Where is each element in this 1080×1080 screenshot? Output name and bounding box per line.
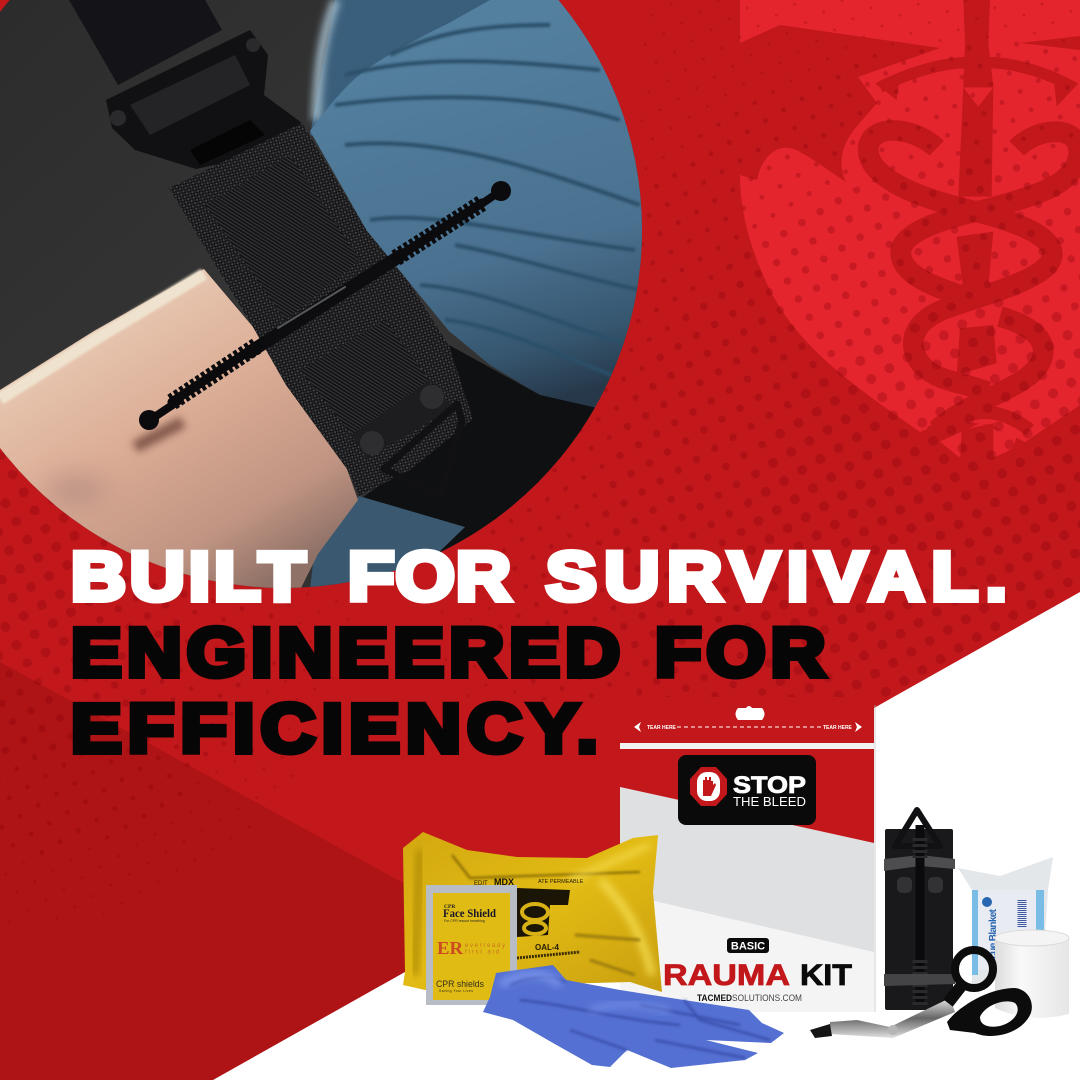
tail of emblem	[940, 423, 1017, 457]
hemostatic bandage: OAL-4	[535, 943, 560, 952]
CPR face shield packet: CPR shields	[436, 979, 484, 990]
trauma kit title: RAUMA	[663, 959, 790, 992]
CPR face shield packet: Face Shield	[443, 906, 496, 920]
headline	[71, 538, 1007, 767]
crossbar	[880, 63, 1073, 87]
staff	[958, 0, 993, 197]
caduceus watermark emblem	[740, 0, 1080, 462]
bandage emblem	[517, 888, 570, 937]
trauma kit title: KIT	[800, 959, 852, 992]
line 2: engineered for: ENGINEERED	[71, 614, 620, 691]
CPR face shield packet: Saving Your Lives	[439, 989, 473, 993]
tear line	[634, 722, 862, 732]
CPR face shield packet: everready	[465, 943, 505, 949]
line 2: engineered for: FOR	[655, 614, 826, 691]
top strap	[69, 0, 222, 85]
CPR face shield packet	[426, 885, 517, 1005]
right snake	[901, 132, 1079, 430]
trauma kit title	[638, 959, 852, 992]
hemostatic bandage	[403, 832, 662, 992]
tourniquet band	[169, 123, 473, 496]
stop the bleed logo: THE BLEED	[733, 794, 806, 809]
hemostatic bandage: EDIT	[474, 881, 488, 887]
basic badge: BASIC	[731, 940, 765, 952]
rescue blanket pack	[958, 857, 1053, 985]
end plate and triangle ring	[352, 381, 466, 478]
tear line: TEAR HERE	[823, 725, 853, 731]
line 3: efficiency: EFFICIENCY.	[71, 690, 598, 767]
hemostatic bandage: ATE PERMEABLE	[538, 879, 584, 885]
CPR face shield packet: ER	[437, 938, 464, 958]
windlass rod	[139, 181, 511, 430]
CPR face shield packet: first aid	[465, 950, 499, 956]
CPR face shield packet: For CPR rescue breathing	[444, 919, 485, 923]
hang hole	[736, 706, 764, 720]
shirt behind	[306, 0, 560, 136]
blue shirt sleeve	[310, 0, 650, 420]
blue nitrile gloves	[483, 965, 784, 1068]
trauma kit title: T	[638, 959, 656, 992]
line 1: built for survival	[71, 538, 1007, 615]
trauma kit package	[620, 697, 876, 1012]
medical tape roll	[995, 930, 1069, 1018]
basic badge	[727, 938, 769, 953]
stop the bleed logo: STOP	[733, 772, 806, 799]
rescue blanket pack: Rescue Blanket	[988, 908, 999, 975]
halftone dot texture right	[440, 0, 1080, 700]
halftone dot texture left	[0, 210, 360, 930]
hemostatic bandage: MDX	[494, 877, 514, 887]
website: TACMEDSOLUTIONS.COM	[697, 993, 802, 1004]
line 1: built for survival: FOR	[348, 538, 511, 615]
M mark	[963, 87, 993, 107]
staff lower segments	[957, 232, 993, 290]
circular photo: tourniquet on arm	[0, 0, 650, 590]
white diagonal panel	[213, 592, 1080, 1080]
stop the bleed logo	[678, 755, 816, 825]
metal buckle	[106, 30, 305, 169]
dark torso under arm	[310, 345, 595, 587]
folded tourniquet	[884, 810, 955, 1010]
line 1: built for survival: SURVIVAL.	[546, 538, 1007, 615]
left snake	[868, 130, 1052, 392]
trauma shears	[810, 950, 1032, 1038]
tear line: TEAR HERE	[647, 725, 677, 731]
line 1: built for survival: BUILT	[71, 538, 305, 615]
CPR face shield packet: CPR	[444, 904, 456, 910]
bare arm	[0, 269, 358, 590]
